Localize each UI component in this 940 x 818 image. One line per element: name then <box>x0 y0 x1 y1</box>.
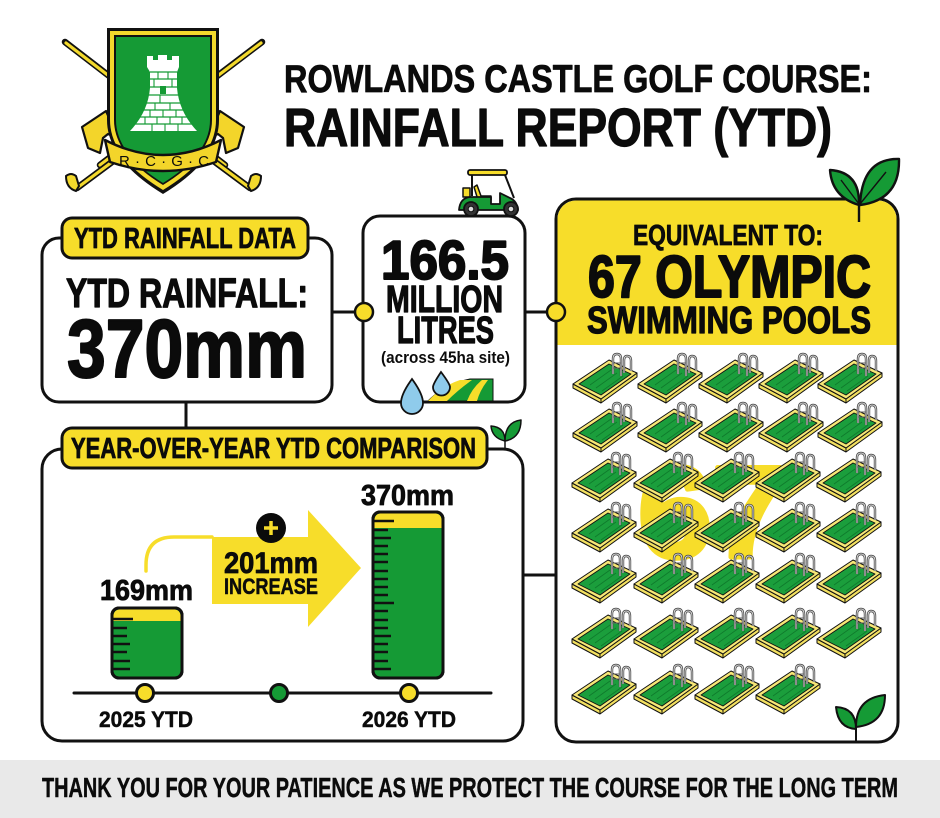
heading: YTD rainfall data: YTD RAINFALL DATA <box>74 223 296 255</box>
pool icon grid <box>572 354 882 714</box>
heading: YTD rainfall data <box>62 218 308 258</box>
text: 201mm increase <box>224 547 318 599</box>
icon: shield <box>107 28 219 194</box>
footer band <box>0 760 940 818</box>
icon: leaf bottom right <box>836 695 885 741</box>
text: YTD rainfall label: YTD RAINFALL: <box>66 270 308 316</box>
icon: green field <box>428 379 493 401</box>
text: million litres: LITRES <box>397 310 494 352</box>
text: 370mm label: 370mm <box>361 480 454 512</box>
text: 370mm value: 370mm <box>67 302 307 395</box>
text: million litres: MILLION <box>386 279 503 321</box>
icon: golf cart <box>459 170 518 216</box>
text: 2026 YTD: 2026 YTD <box>362 707 456 732</box>
text: 67 Olympic: 67 OLYMPIC <box>588 244 871 310</box>
icon: ribbon ends <box>82 111 244 153</box>
icon: RCGC banner <box>105 140 221 171</box>
text: million litres <box>386 279 503 352</box>
icon: leaf top right <box>830 159 899 222</box>
text: 2025 YTD: 2025 YTD <box>99 707 193 732</box>
title: RAINFALL REPORT (YTD) <box>284 98 832 158</box>
text: swimming pools: SWIMMING POOLS <box>587 300 871 342</box>
icon: water drops <box>401 372 450 414</box>
arrow: increase <box>146 510 361 627</box>
icon: RCGC banner: R · C · G · C <box>119 153 209 170</box>
bar: 2025 YTD <box>112 608 182 678</box>
icon: plus badge <box>256 513 286 543</box>
text: equivalent to: EQUIVALENT TO: <box>633 220 823 252</box>
icon: connector dot right <box>547 303 565 321</box>
logo: R.C.G.C crest <box>65 28 262 194</box>
text: 201mm increase: 201mm <box>224 547 318 580</box>
panel: YTD rainfall data <box>42 218 332 402</box>
timeline axis <box>74 684 491 702</box>
icon: white castle tower <box>130 55 197 131</box>
icon: crossed golf clubs <box>65 42 262 191</box>
heading: year-over-year YTD comparison <box>62 428 487 468</box>
heading: year-over-year YTD comparison: YEAR-OVER-YEAR YTD COMPARISON <box>71 433 476 465</box>
yellow header <box>558 200 896 345</box>
icon: small leaf <box>491 420 521 448</box>
text: large faint 67: 67 <box>638 439 786 585</box>
title <box>284 58 872 158</box>
text: across 45ha site: (across 45ha site) <box>381 349 510 367</box>
panel: year over year comparison <box>42 428 523 741</box>
panel: Olympic pool equivalent <box>556 199 898 742</box>
connectors between panels <box>186 312 556 575</box>
text: 166.5 value: 166.5 <box>381 229 509 291</box>
icon: connector dot left <box>355 303 373 321</box>
text: 169mm: 169mm <box>100 575 193 607</box>
text: 201mm increase: INCREASE <box>224 574 318 599</box>
panel: million litres <box>363 216 525 414</box>
bar: 2026 YTD <box>373 512 443 678</box>
